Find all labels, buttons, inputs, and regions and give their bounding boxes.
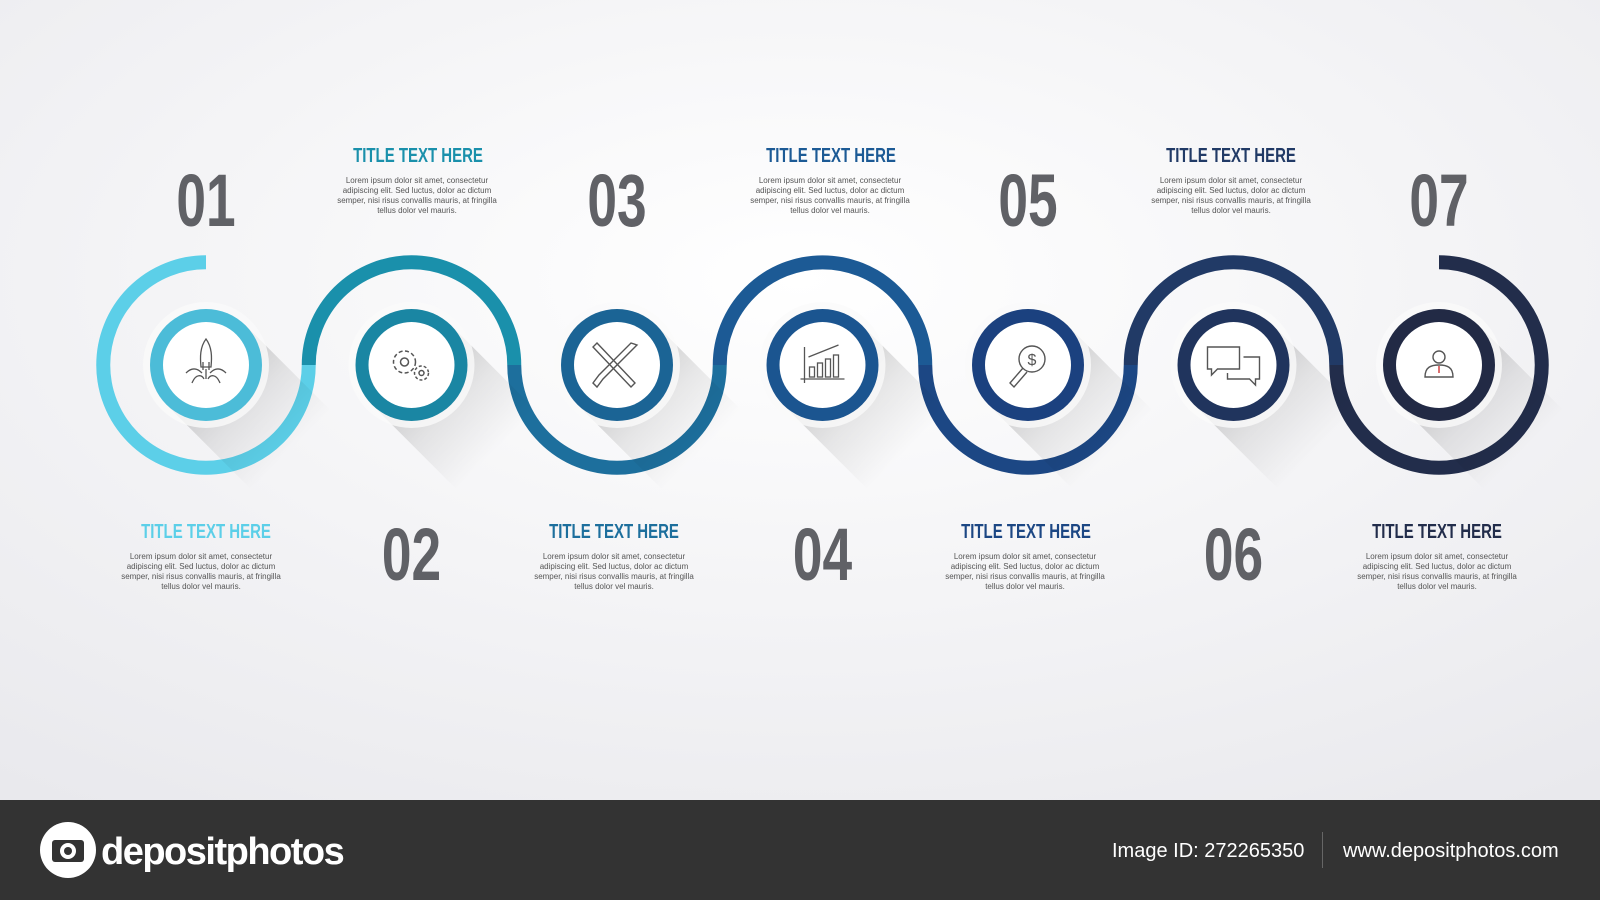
step 6 circle xyxy=(1170,302,1358,489)
titles: TITLE TEXT HERE xyxy=(961,520,1091,543)
numbers: 02 xyxy=(382,513,441,596)
wave path xyxy=(103,262,1542,468)
body texts: adipiscing elit. Sed luctus, dolor ac dictum xyxy=(127,562,276,571)
numbers: 07 xyxy=(1409,159,1469,242)
icon: chat xyxy=(1208,347,1260,385)
step 7 circle xyxy=(1376,302,1563,489)
body texts: adipiscing elit. Sed luctus, dolor ac dictum xyxy=(951,562,1100,571)
body texts: Lorem ipsum dolor sit amet, consectetur xyxy=(130,552,272,561)
icon: gears xyxy=(394,351,428,380)
titles: TITLE TEXT HERE xyxy=(353,144,483,167)
numbers: 06 xyxy=(1204,513,1263,596)
icon: rocket xyxy=(186,339,226,383)
body texts: Lorem ipsum dolor sit amet, consectetur xyxy=(1366,552,1508,561)
body texts: tellus dolor vel mauris. xyxy=(1191,206,1271,215)
titles: TITLE TEXT HERE xyxy=(1166,144,1296,167)
body texts xyxy=(121,176,1517,591)
footer logo: depositphotos xyxy=(101,831,344,873)
step 2 circle xyxy=(348,302,536,489)
titles: TITLE TEXT HERE xyxy=(549,520,679,543)
step 4 circle xyxy=(760,302,947,489)
body texts: semper, nisi risus convallis mauris, at fringilla xyxy=(1357,572,1517,581)
body texts: adipiscing elit. Sed luctus, dolor ac dictum xyxy=(1157,186,1306,195)
body texts: tellus dolor vel mauris. xyxy=(161,582,241,591)
titles xyxy=(141,144,1502,543)
body texts: Lorem ipsum dolor sit amet, consectetur xyxy=(954,552,1096,561)
icon: person xyxy=(1425,351,1453,377)
body texts: adipiscing elit. Sed luctus, dolor ac dictum xyxy=(1363,562,1512,571)
titles: TITLE TEXT HERE xyxy=(766,144,896,167)
body texts: Lorem ipsum dolor sit amet, consectetur xyxy=(759,176,901,185)
body texts: adipiscing elit. Sed luctus, dolor ac dictum xyxy=(756,186,905,195)
step 5 circle xyxy=(965,302,1152,489)
icon: magnifier dollar xyxy=(1010,346,1045,387)
numbers: 05 xyxy=(998,159,1058,242)
numbers xyxy=(176,159,1469,596)
body texts: tellus dolor vel mauris. xyxy=(790,206,870,215)
body texts: Lorem ipsum dolor sit amet, consectetur xyxy=(346,176,488,185)
icon: chart xyxy=(800,345,844,383)
body texts: adipiscing elit. Sed luctus, dolor ac dictum xyxy=(540,562,689,571)
numbers: 03 xyxy=(587,159,647,242)
body texts: Lorem ipsum dolor sit amet, consectetur xyxy=(1160,176,1302,185)
step 3 circle xyxy=(554,302,741,489)
footer image id: Image ID: 272265350 xyxy=(1112,840,1304,862)
body texts: adipiscing elit. Sed luctus, dolor ac dictum xyxy=(343,186,492,195)
body texts: tellus dolor vel mauris. xyxy=(1397,582,1477,591)
footer logo xyxy=(40,822,344,878)
body texts: semper, nisi risus convallis mauris, at fringilla xyxy=(750,196,910,205)
icon: tools xyxy=(593,343,637,387)
body texts: Lorem ipsum dolor sit amet, consectetur xyxy=(543,552,685,561)
body texts: tellus dolor vel mauris. xyxy=(574,582,654,591)
body texts: semper, nisi risus convallis mauris, at fringilla xyxy=(337,196,497,205)
body texts: semper, nisi risus convallis mauris, at fringilla xyxy=(534,572,694,581)
icon: magnifier dollar: $ xyxy=(1028,352,1037,369)
numbers: 01 xyxy=(176,159,236,242)
titles: TITLE TEXT HERE xyxy=(141,520,271,543)
step 1 circle xyxy=(143,302,330,489)
body texts: tellus dolor vel mauris. xyxy=(377,206,457,215)
footer url: www.depositphotos.com xyxy=(1342,840,1559,862)
body texts: semper, nisi risus convallis mauris, at fringilla xyxy=(945,572,1105,581)
footer bar xyxy=(0,800,1600,900)
body texts: semper, nisi risus convallis mauris, at fringilla xyxy=(121,572,281,581)
titles: TITLE TEXT HERE xyxy=(1372,520,1502,543)
body texts: tellus dolor vel mauris. xyxy=(985,582,1065,591)
body texts: semper, nisi risus convallis mauris, at fringilla xyxy=(1151,196,1311,205)
numbers: 04 xyxy=(793,513,852,596)
